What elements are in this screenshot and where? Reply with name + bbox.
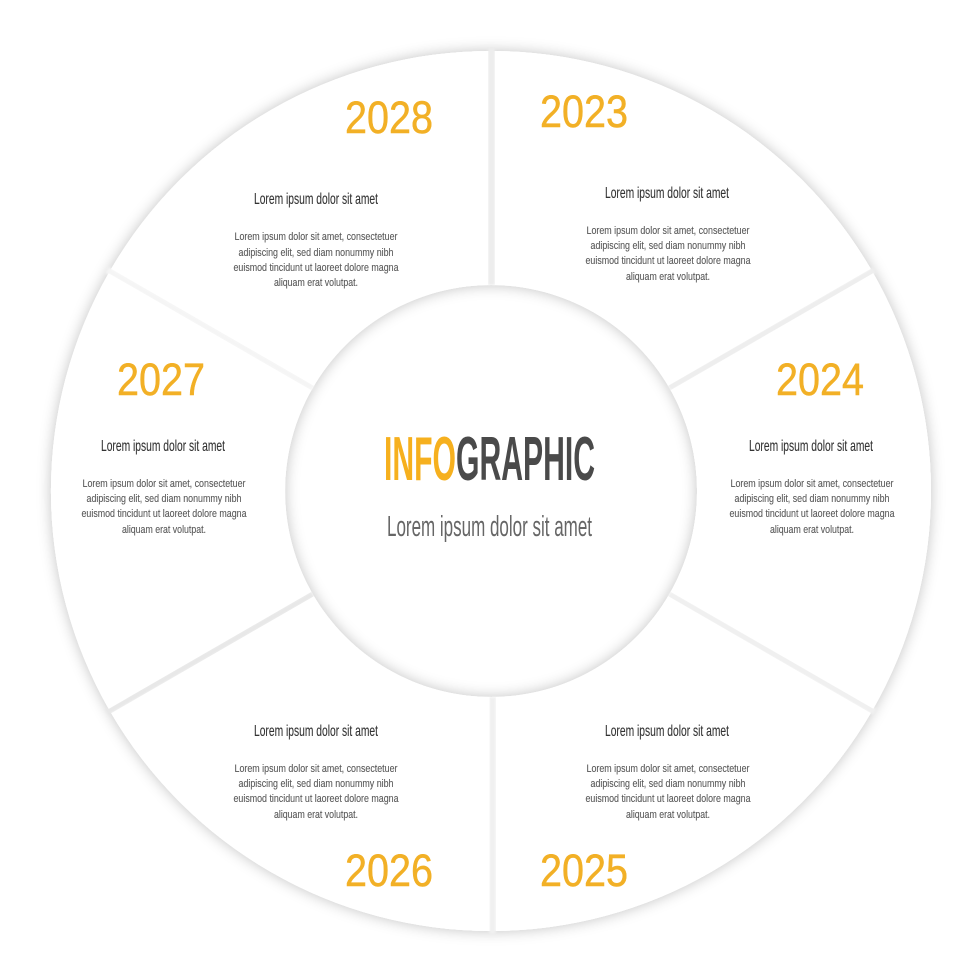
text block: 2023 bbox=[586, 225, 751, 283]
text block: 2026: adipiscing elit, sed diam nonummy nibh bbox=[238, 778, 394, 790]
text block: 2023: adipiscing elit, sed diam nonummy nibh bbox=[590, 240, 746, 252]
panel: 2026 bbox=[111, 596, 489, 931]
text block: 2026: Lorem ipsum dolor sit amet, consectetuer bbox=[234, 763, 398, 775]
panel: 2024 bbox=[671, 273, 931, 709]
text block: 2026: euismod tincidunt ut laoreet dolore magna bbox=[234, 793, 399, 805]
text block: 2027: euismod tincidunt ut laoreet dolore magna bbox=[82, 508, 247, 520]
heading: 2025: Lorem ipsum dolor sit amet bbox=[605, 723, 729, 740]
text block: 2024: euismod tincidunt ut laoreet dolore magna bbox=[730, 508, 895, 520]
text block: 2024: Lorem ipsum dolor sit amet, consectetuer bbox=[730, 478, 894, 490]
text block: 2025 bbox=[586, 763, 751, 821]
text block: 2028: Lorem ipsum dolor sit amet, consectetuer bbox=[234, 231, 398, 243]
panel: 2023 bbox=[495, 51, 871, 386]
segment: 2023 bbox=[495, 51, 871, 386]
subtitle: Lorem ipsum dolor sit amet bbox=[387, 511, 592, 543]
segment: 2025 bbox=[496, 596, 871, 931]
text block: 2025: Lorem ipsum dolor sit amet, consectetuer bbox=[586, 763, 750, 775]
heading: 2023: Lorem ipsum dolor sit amet bbox=[605, 185, 729, 202]
text block: 2024: aliquam erat volutpat. bbox=[770, 524, 854, 536]
text block: 2024 bbox=[730, 478, 895, 536]
year: 2024: 2024 bbox=[776, 354, 864, 405]
title: INFOGRAPHIC bbox=[384, 425, 595, 494]
panel: 2025 bbox=[496, 596, 871, 931]
heading: 2027: Lorem ipsum dolor sit amet bbox=[101, 438, 225, 455]
text block: 2028: adipiscing elit, sed diam nonummy nibh bbox=[238, 247, 394, 259]
text block: 2028: aliquam erat volutpat. bbox=[274, 277, 358, 289]
year: 2026: 2026 bbox=[345, 845, 433, 896]
heading: 2026: Lorem ipsum dolor sit amet bbox=[254, 723, 378, 740]
segment: 2026 bbox=[111, 596, 489, 931]
text block: 2023: Lorem ipsum dolor sit amet, consectetuer bbox=[586, 225, 750, 237]
text block: 2023: aliquam erat volutpat. bbox=[626, 271, 710, 283]
heading: 2028: Lorem ipsum dolor sit amet bbox=[254, 191, 378, 208]
year: 2023: 2023 bbox=[540, 86, 628, 137]
text block: 2027: Lorem ipsum dolor sit amet, consectetuer bbox=[82, 478, 246, 490]
year: 2027: 2027 bbox=[117, 354, 205, 405]
text block: 2026: aliquam erat volutpat. bbox=[274, 809, 358, 821]
center text bbox=[384, 425, 595, 543]
segment: 2028 bbox=[111, 51, 488, 386]
year: 2025: 2025 bbox=[540, 845, 628, 896]
segment: 2024 bbox=[671, 273, 931, 709]
spoke gaps bbox=[107, 48, 875, 934]
text block: 2027 bbox=[82, 478, 247, 536]
text block: 2025: aliquam erat volutpat. bbox=[626, 809, 710, 821]
segment: 2027 bbox=[51, 273, 311, 709]
text block: 2024: adipiscing elit, sed diam nonummy nibh bbox=[734, 493, 890, 505]
text block: 2026 bbox=[234, 763, 399, 821]
center circle bbox=[285, 285, 697, 697]
text block: 2023: euismod tincidunt ut laoreet dolore magna bbox=[586, 255, 751, 267]
text block: 2025: adipiscing elit, sed diam nonummy nibh bbox=[590, 778, 746, 790]
text block: 2028 bbox=[234, 231, 399, 289]
text block: 2025: euismod tincidunt ut laoreet dolore magna bbox=[586, 793, 751, 805]
text block: 2027: aliquam erat volutpat. bbox=[122, 524, 206, 536]
year: 2028: 2028 bbox=[345, 92, 433, 143]
text block: 2028: euismod tincidunt ut laoreet dolore magna bbox=[234, 262, 399, 274]
panel: 2027 bbox=[51, 273, 311, 709]
heading: 2024: Lorem ipsum dolor sit amet bbox=[749, 438, 873, 455]
text block: 2027: adipiscing elit, sed diam nonummy nibh bbox=[86, 493, 242, 505]
panel: 2028 bbox=[111, 51, 488, 386]
